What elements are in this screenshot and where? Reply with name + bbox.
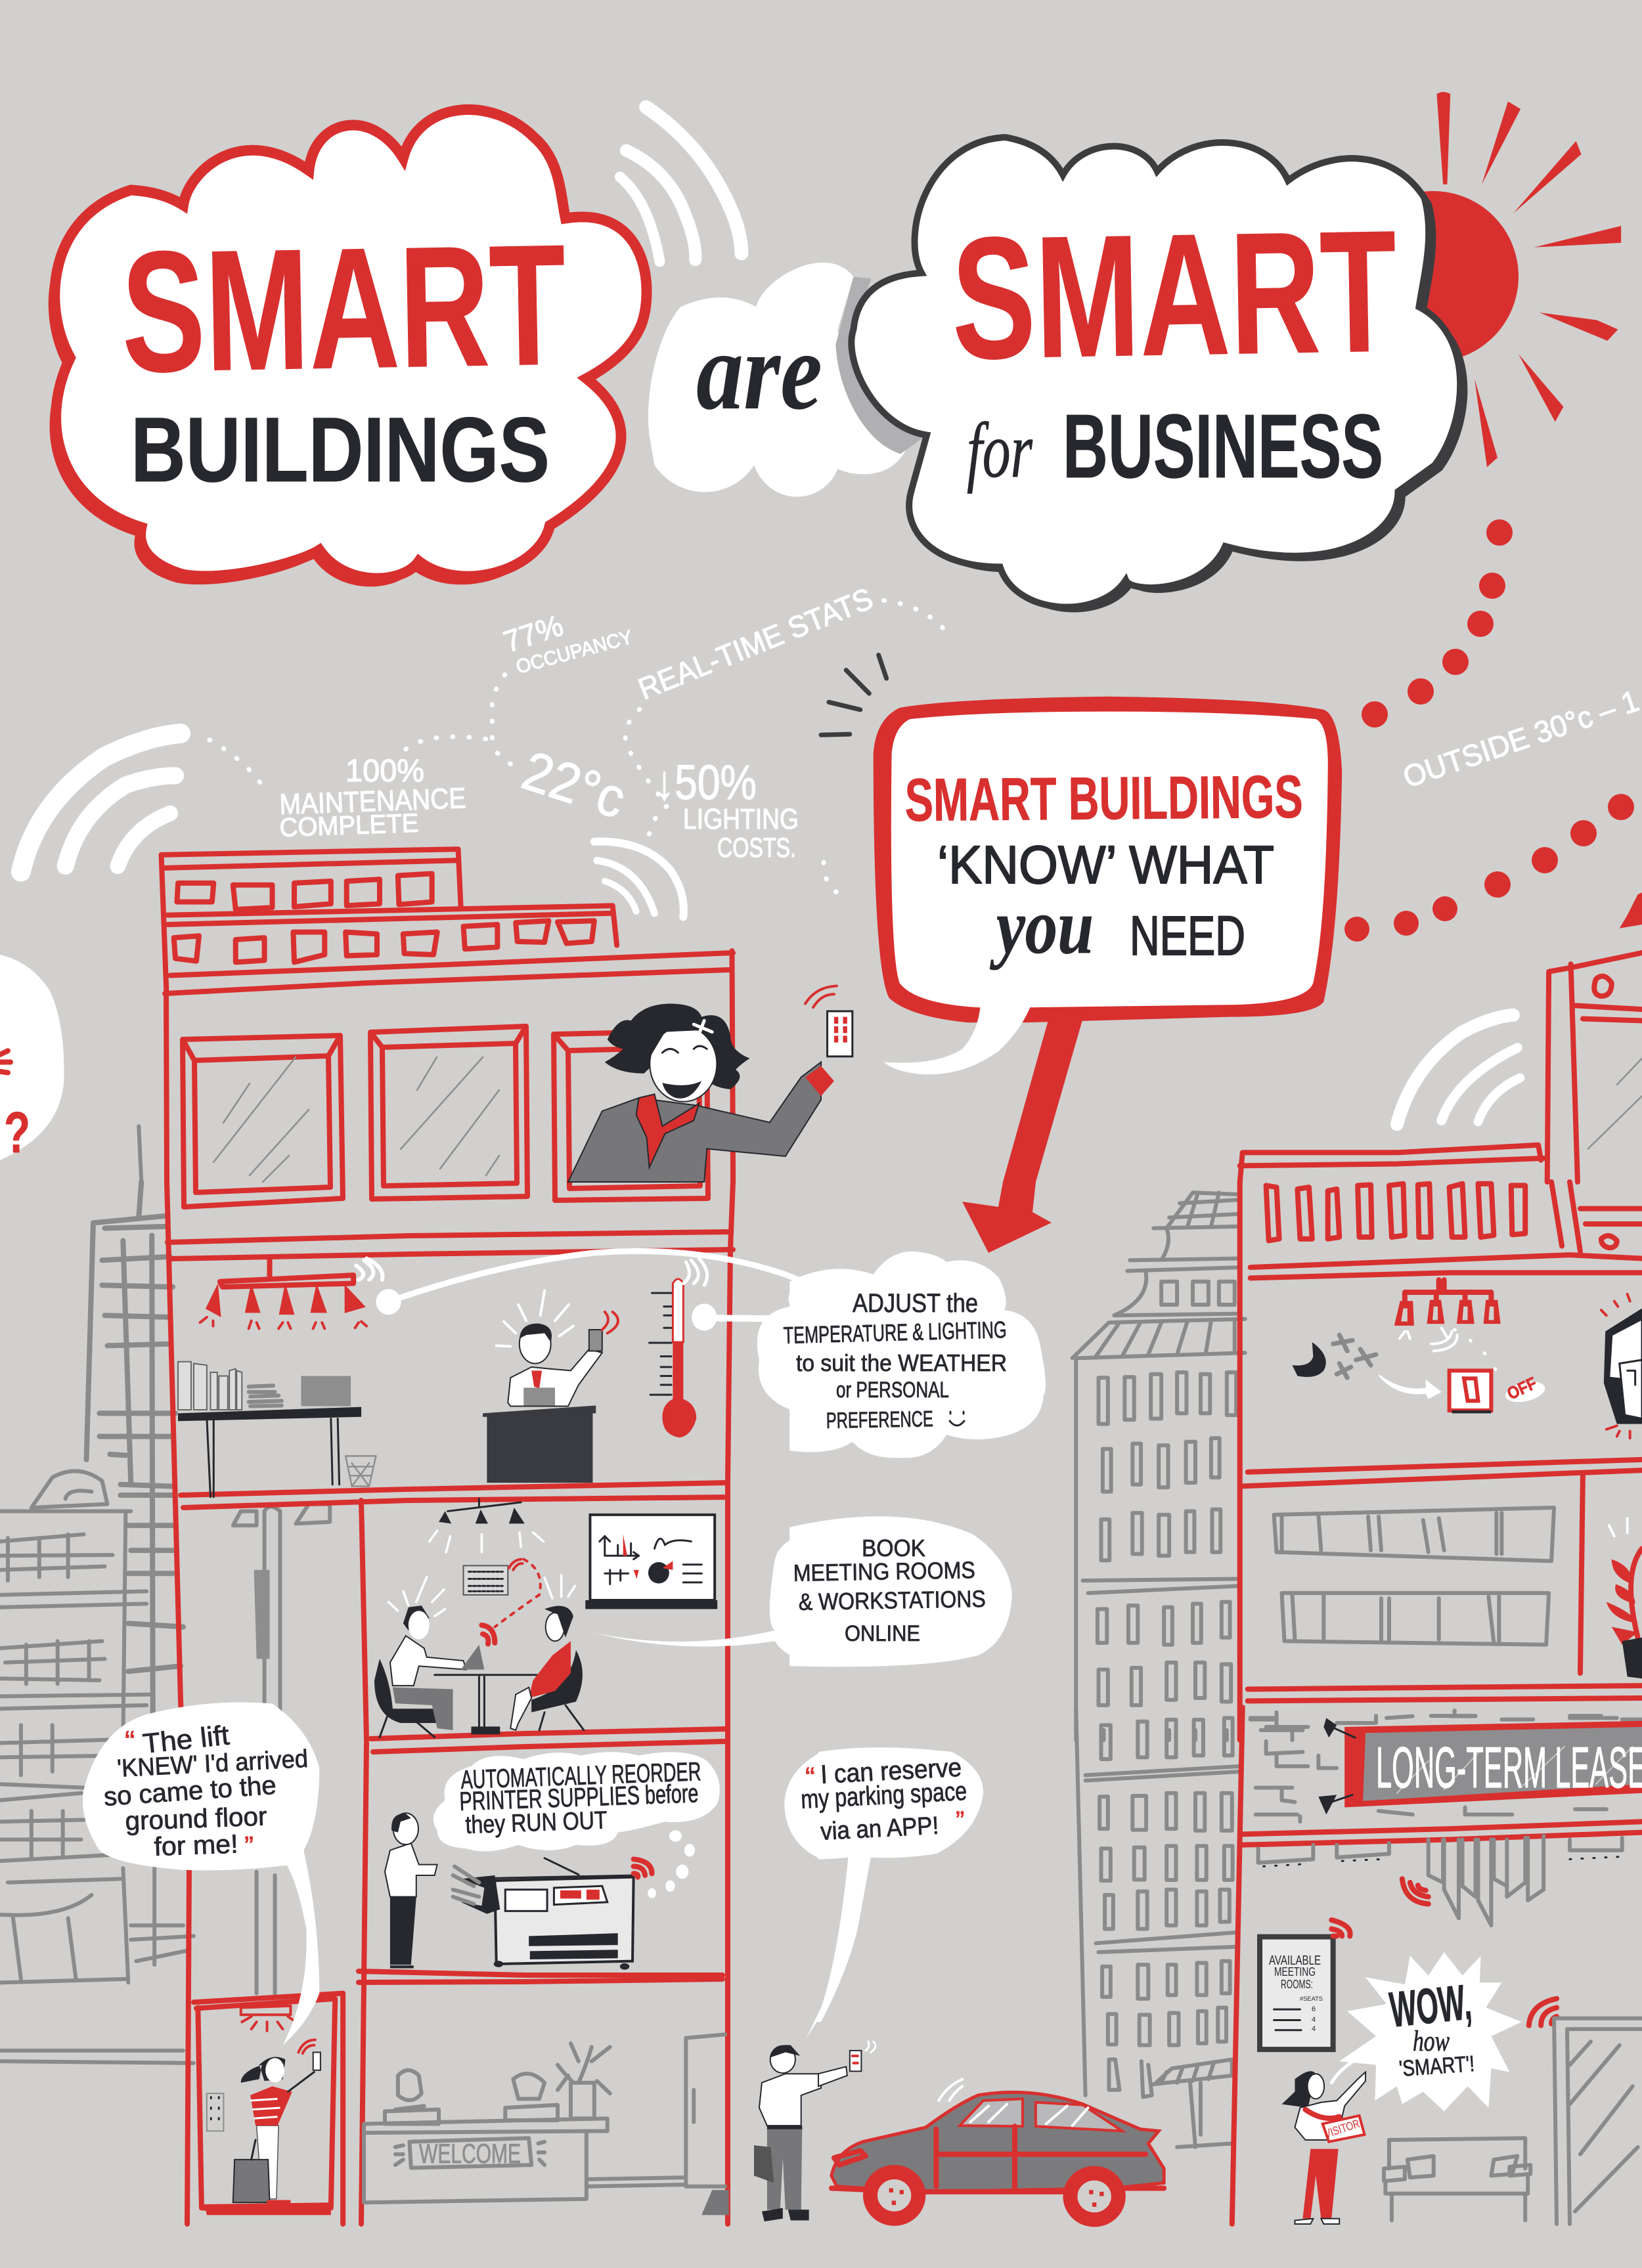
thought cloud: printer supplies — [433, 1752, 720, 1851]
cloud: book meeting rooms: & WORKSTATIONS — [798, 1585, 986, 1615]
sign: long-term lease — [1318, 1718, 1642, 1814]
label: off oval — [1501, 1378, 1550, 1406]
person in lift with suitcase — [233, 2039, 321, 2204]
upper row grey windows — [1274, 1508, 1554, 1645]
icon: moon and stars — [1292, 1335, 1376, 1378]
poster text: available meeting rooms: MEETING — [1274, 1965, 1316, 1978]
speech bubble: parking space: I can reserve — [820, 1753, 962, 1789]
room schedule sheet — [464, 1559, 541, 1627]
left partial bubble with question mark — [0, 955, 64, 1165]
label: real-time stats: REAL-TIME STATS — [633, 581, 877, 706]
speech tail of visitor — [1331, 2051, 1376, 2083]
speech bubble: lift: “ — [125, 1724, 135, 1758]
speech box: smart buildings know what you need: NEED — [1130, 905, 1245, 967]
three upper windows — [183, 1026, 708, 1207]
background grey tower centre — [1073, 1192, 1245, 2147]
lobby door — [1554, 2018, 1642, 2224]
stat: 50% lighting costs: COSTS. — [717, 832, 796, 863]
off label text: OFF — [1504, 1373, 1540, 1403]
speech box: smart buildings know what you need: you — [989, 883, 1094, 970]
speech bubble: parking space: my parking space — [800, 1777, 967, 1814]
title text: BUSINESS: BUSINESS — [1063, 396, 1383, 497]
cloud: book meeting rooms: MEETING ROOMS — [793, 1556, 975, 1586]
meeting room lamp — [430, 1498, 543, 1552]
stat: 77% occupancy: OCCUPANCY — [514, 626, 635, 678]
speech bubble: lift: 'KNEW' I'd arrived — [116, 1745, 309, 1783]
speech box: smart buildings know what you need — [874, 697, 1342, 1253]
cloud: adjust temperature: to suit the WEATHER — [796, 1349, 1007, 1376]
shelf table with binders — [178, 1362, 376, 1497]
title cloud: smart for business — [851, 137, 1467, 613]
cloud: book meeting rooms: BOOK — [862, 1535, 925, 1561]
cloud: book meeting rooms: ONLINE — [845, 1621, 920, 1646]
cloud: adjust temperature: TEMPERATURE & LIGHTING — [783, 1316, 1007, 1349]
speech box: smart buildings know what you need: SMART BUILDINGS — [904, 764, 1303, 834]
speech bubble: lift — [83, 1703, 319, 2045]
attention ticks near speech box — [821, 655, 887, 735]
visitor badge text: VISITOR — [1323, 2117, 1362, 2141]
stat: 50% lighting costs: LIGHTING — [683, 803, 799, 835]
poster text: available meeting rooms: #SEATS — [1300, 1995, 1323, 2002]
icon: light switch off — [1450, 1370, 1491, 1413]
brick wall top — [1251, 1711, 1642, 1740]
burst text: wow how smart: 'SMART'! — [1398, 2051, 1475, 2082]
speech bubble: lift: for me! — [154, 1830, 238, 1862]
word: are: are — [696, 309, 822, 433]
poster text: available meeting rooms: 4 — [1312, 2025, 1316, 2033]
person reserving parking with phone — [754, 2041, 876, 2221]
red dots from sun — [1362, 519, 1513, 728]
background grey buildings left — [0, 1126, 330, 2063]
red dots to right building — [1344, 794, 1634, 942]
title text: BUILDINGS: BUILDINGS — [131, 398, 550, 501]
stat: 22 degrees: 22°c — [515, 739, 633, 830]
text: welcome sign: WELCOME — [419, 2138, 521, 2169]
building roof and upper facade — [162, 849, 733, 1182]
icon: ceiling lamp — [200, 1259, 366, 1328]
white wifi arcs beside title — [620, 107, 742, 261]
white wifi arcs top-left of building — [21, 733, 684, 917]
poster text: available meeting rooms: ROOMS: — [1281, 1978, 1313, 1991]
icon: thermometer — [650, 1259, 796, 1437]
title cloud: smart buildings — [49, 110, 647, 586]
plant in pot — [1607, 1518, 1642, 1678]
speech bubble: lift: The lift — [141, 1719, 231, 1759]
lamp wifi to cloud connector — [356, 1251, 821, 1315]
stat: 77% occupancy: 77% — [499, 608, 567, 659]
text: printer bubble: PRINTER SUPPLIES before — [459, 1779, 699, 1816]
available rooms poster — [1260, 1920, 1350, 2049]
thought dots from printer — [648, 1830, 695, 1898]
stat: 77% occupancy — [499, 608, 635, 678]
stat: 100% maintenance: MAINTENANCE — [279, 782, 466, 821]
poster text: available meeting rooms: 4 — [1312, 2016, 1316, 2024]
speech bubble: parking space: ” — [956, 1806, 964, 1835]
cloud: adjust temperature: ADJUST the — [853, 1289, 978, 1318]
lift car — [194, 1994, 343, 2224]
left partial bubble with question mark: ? — [4, 1100, 30, 1165]
two people at meeting table — [374, 1575, 584, 1737]
title text: for: for — [967, 406, 1033, 494]
speech bubble: lift: ” — [244, 1831, 254, 1862]
panel: right red smart building — [832, 892, 1642, 2224]
dotted connector right of stats — [824, 600, 946, 896]
poster text: available meeting rooms: AVAILABLE — [1269, 1953, 1321, 1968]
sun with rays — [1348, 92, 1621, 467]
stat: 50% lighting costs — [654, 755, 799, 863]
cloud: adjust temperature: or PERSONAL — [836, 1378, 949, 1403]
stat: 100% maintenance — [279, 754, 466, 842]
woman waving from window with phone — [568, 986, 853, 1182]
stat: 50% lighting costs: ↓50% — [654, 755, 757, 810]
speech bubble: lift: so came to the — [103, 1771, 277, 1812]
text: printer bubble — [459, 1757, 701, 1839]
wifi red at chandelier — [1402, 1879, 1429, 1904]
speech box: smart buildings know what you need: ‘KNOW’ WHAT — [937, 835, 1274, 895]
printer floor — [385, 1752, 720, 1970]
red wifi above door — [1529, 1999, 1557, 2026]
poster text: available meeting rooms: 6 — [1312, 2005, 1316, 2013]
arrow: night to switch — [1379, 1374, 1442, 1399]
connector cloud: are — [648, 263, 927, 497]
papers stack — [1601, 1294, 1642, 1438]
receptionist area — [364, 2034, 729, 2215]
burst text: wow how smart: how — [1413, 2025, 1450, 2057]
burst text: wow how smart: WOW, — [1387, 1974, 1474, 2038]
building walls and floors — [166, 993, 733, 2224]
cloud: adjust temperature — [757, 1252, 1046, 1458]
sofa — [1384, 2138, 1530, 2221]
icon: automated ceiling lamp — [1396, 1280, 1499, 1372]
stat: 100% maintenance: 100% — [345, 754, 424, 789]
speech bubble: lift: ground floor — [125, 1802, 267, 1836]
stat: 100% maintenance: COMPLETE — [279, 809, 419, 842]
cloud: book meeting rooms — [592, 1516, 1012, 1667]
speech bubble: parking space — [784, 1747, 983, 2038]
visitor character — [1282, 2071, 1365, 2224]
white wifi arcs above right building — [1240, 892, 1642, 1182]
big arrow down — [962, 1018, 1083, 1253]
text: printer bubble: AUTOMATICALLY REORDER — [460, 1757, 701, 1795]
wow burst — [1339, 1952, 1522, 2111]
burst text: wow how smart — [1387, 1974, 1475, 2082]
man at printer — [385, 1813, 437, 1969]
text: printer bubble: they RUN OUT — [465, 1806, 608, 1839]
floor scene: desks, lights, thermometer — [178, 1251, 821, 1737]
dotted stat connectors — [210, 668, 667, 834]
cloud: adjust temperature: PREFERENCE — [826, 1407, 933, 1433]
printer machine — [453, 1858, 652, 1970]
man at desk with phone — [483, 1290, 618, 1483]
whiteboard — [585, 1515, 717, 1609]
title text: SMART: SMART — [120, 208, 567, 408]
ceiling fittings and chandelier — [1258, 1836, 1622, 1925]
title text: SMART right: SMART — [950, 194, 1398, 395]
panel: left red smart building — [162, 849, 733, 2224]
welcome sign — [395, 2138, 544, 2168]
car — [832, 2079, 1164, 2219]
speech bubble: parking space: “ — [805, 1762, 815, 1794]
poster text: available meeting rooms — [1269, 1953, 1323, 2033]
speech bubble: parking space: via an APP! — [820, 1812, 939, 1846]
